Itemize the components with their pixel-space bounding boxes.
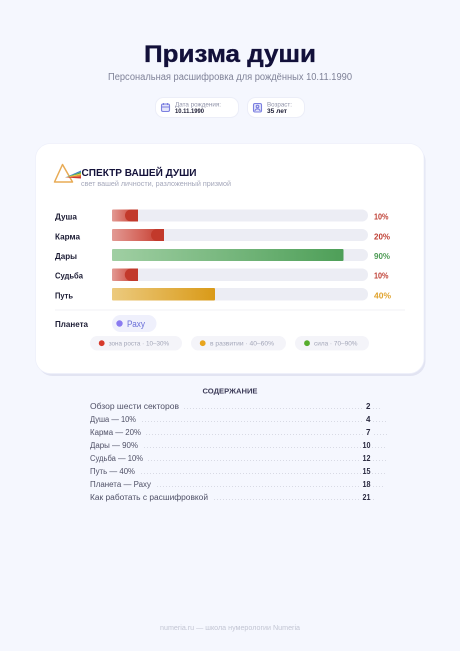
row: Карма: Карма [55,232,80,242]
row: Душа [55,210,389,222]
legend: developing [191,336,286,350]
badge: date of birth [156,98,238,118]
legend: strength [295,336,369,350]
toc item: Карма: 7 [366,428,371,437]
toc item: Планета [90,480,384,489]
toc item: Судьба: Судьба — 10% [90,454,143,463]
row: Путь [55,288,392,300]
toc item: Путь: Путь — 40% [90,467,135,476]
toc item: Планета: 18 [362,480,371,489]
toc item: Дары [90,441,386,450]
toc item: overview: 2 [366,402,371,411]
legend: developing: в развитии · 40–60% [210,340,274,348]
toc item: Душа [90,415,387,424]
row: Судьба: 10% [374,270,389,280]
row: Душа: Душа [55,212,77,222]
toc item: Дары: Дары — 90% [90,441,138,450]
row: Дары: Дары [55,251,77,261]
row: Душа: 10% [374,212,389,222]
date value: 10.11.1990 [175,108,204,115]
toc item: Карма: Карма — 20% [90,428,141,437]
icon: calendar [162,103,170,112]
panel subheading: свет вашей личности, разложенный призмой [81,179,231,188]
legend: growth: зона роста · 10–30% [109,340,169,348]
age value: 35 лет [267,108,288,115]
row: Карма [55,229,391,242]
age label: Возраст: [267,102,292,108]
planet badge [112,315,156,332]
row: Путь: Путь [55,290,73,300]
toc item: Карма [90,428,387,437]
toc item: how to work [90,493,375,502]
row: Путь: 40% [374,290,392,300]
toc item: how to work: 21 [362,493,371,502]
toc item: Судьба [90,454,386,463]
panel: soul spectrum [36,144,426,376]
footer: numeria.ru — школа нумерологии Numeria [160,625,300,632]
icon: person [254,104,262,112]
toc item: Душа: 4 [366,415,371,424]
toc item: Душа: Душа — 10% [90,415,136,424]
row: Дары [55,249,391,261]
date label: Дата рождения: [175,102,221,108]
row: Судьба: Судьба [55,270,83,280]
table of contents [90,402,387,502]
title: Призма души [144,41,316,68]
row: Карма: 20% [374,232,391,242]
row: Судьба [55,268,389,281]
legend: strength: сила · 70–90% [314,340,358,348]
toc item: Судьба: 12 [362,454,371,463]
toc item: Путь [90,467,386,476]
subtitle: Персональная расшифровка для рождённых 10.11.1990 [108,71,352,83]
icon: prism [54,164,81,182]
toc item: Дары: 10 [362,441,371,450]
planet label: Планета [55,319,88,329]
toc item: Планета: Планета — Раху [90,480,151,489]
toc item: how to work: Как работать с расшифровкой [90,493,208,502]
legend: growth [90,336,182,350]
row: Дары: 90% [374,251,391,261]
panel heading: СПЕКТР ВАШЕЙ ДУШИ [82,166,196,179]
toc item: overview: Обзор шести секторов [90,402,179,411]
badge: age [248,98,304,118]
planet badge: Раху [127,319,146,329]
toc item: Путь: 15 [362,467,371,476]
toc item: overview [90,402,382,411]
contents heading: СОДЕРЖАНИЕ [202,386,258,396]
